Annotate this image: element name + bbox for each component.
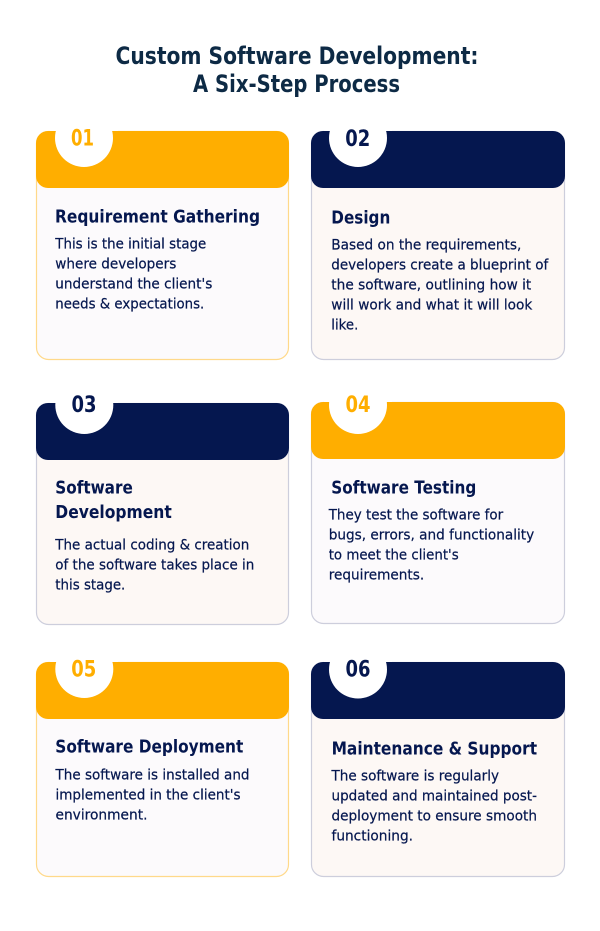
step 01 description: This is the initial stage: [54, 236, 206, 252]
step 01 description: [54, 236, 212, 312]
step 03 heading: Development: [55, 502, 172, 523]
step 01 description: understand the client's: [55, 276, 212, 292]
step 03 header band: [36, 403, 289, 460]
title: Custom Software Development:: [116, 42, 478, 70]
step 04 heading: Software Testing: [331, 477, 476, 498]
panel: step 01 requirement gathering: [36, 109, 289, 360]
step 04 description: They test the software for: [328, 507, 503, 523]
step 04 description: to meet the client's: [329, 547, 459, 563]
step 03 number badge: [50, 376, 118, 434]
step 02 number badge: [324, 109, 392, 167]
step 06 description: functioning.: [332, 828, 413, 844]
step 05 description: The software is installed and: [55, 767, 250, 783]
step 02 description: the software, outlining how it: [331, 277, 532, 293]
step 06 description: updated and maintained post-: [332, 788, 537, 804]
step 01 header band: [36, 131, 289, 188]
step 06 description: The software is regularly: [331, 768, 499, 784]
step 02 description: developers create a blueprint of: [331, 257, 549, 273]
step 01 heading: Requirement Gathering: [55, 206, 260, 227]
step 01 number badge: [50, 109, 118, 167]
step 03 description: of the software takes place in: [55, 557, 254, 573]
step 02 heading: Design: [331, 207, 390, 228]
step 01 number badge: 01: [71, 126, 94, 151]
step 06 number badge: [324, 640, 392, 698]
step 02 description: like.: [331, 317, 358, 333]
step 05 number badge: [50, 640, 118, 698]
panel: step 02 design: [311, 109, 565, 360]
step 04 description: bugs, errors, and functionality: [329, 527, 534, 543]
step 03 description: The actual coding & creation: [54, 537, 249, 553]
step 02 description: [331, 237, 549, 333]
panel: step 05 software deployment: [36, 640, 289, 876]
step 03 heading: Software: [55, 477, 133, 498]
step 05 description: [55, 767, 250, 823]
step 06 description: deployment to ensure smooth: [332, 808, 537, 824]
step 05 number badge: 05: [71, 657, 96, 682]
step 03 number badge: 03: [72, 393, 96, 418]
panel: step 04 software testing: [311, 376, 565, 624]
step 04 number badge: 04: [346, 393, 370, 418]
step 06 description: [331, 768, 537, 844]
step 01 description: where developers: [55, 256, 176, 272]
panel: step 06 maintenance and support: [311, 640, 565, 876]
step 05 description: environment.: [56, 807, 148, 823]
step 03 description: [54, 537, 254, 593]
step 03 description: this stage.: [55, 577, 125, 593]
step 02 description: Based on the requirements,: [331, 237, 521, 253]
step 05 header band: [36, 662, 289, 719]
step 02 header band: [311, 131, 565, 188]
title: [116, 42, 478, 98]
step 02 description: will work and what it will look: [331, 297, 533, 313]
step 05 description: implemented in the client's: [56, 787, 240, 803]
step 04 header band: [311, 402, 565, 459]
step 05 heading: Software Deployment: [55, 737, 244, 758]
panel: step 03 software development: [36, 376, 289, 624]
step 04 number badge: [324, 376, 392, 434]
step 04 description: requirements.: [329, 567, 424, 583]
step 04 description: [328, 507, 534, 583]
step 01 description: needs & expectations.: [55, 296, 204, 312]
step 06 header band: [311, 662, 565, 719]
step 02 number badge: 02: [345, 127, 370, 152]
title: A Six-Step Process: [193, 70, 400, 98]
step 06 heading: Maintenance & Support: [332, 738, 538, 759]
step 06 number badge: 06: [346, 657, 370, 682]
step 03 heading: [55, 477, 172, 523]
